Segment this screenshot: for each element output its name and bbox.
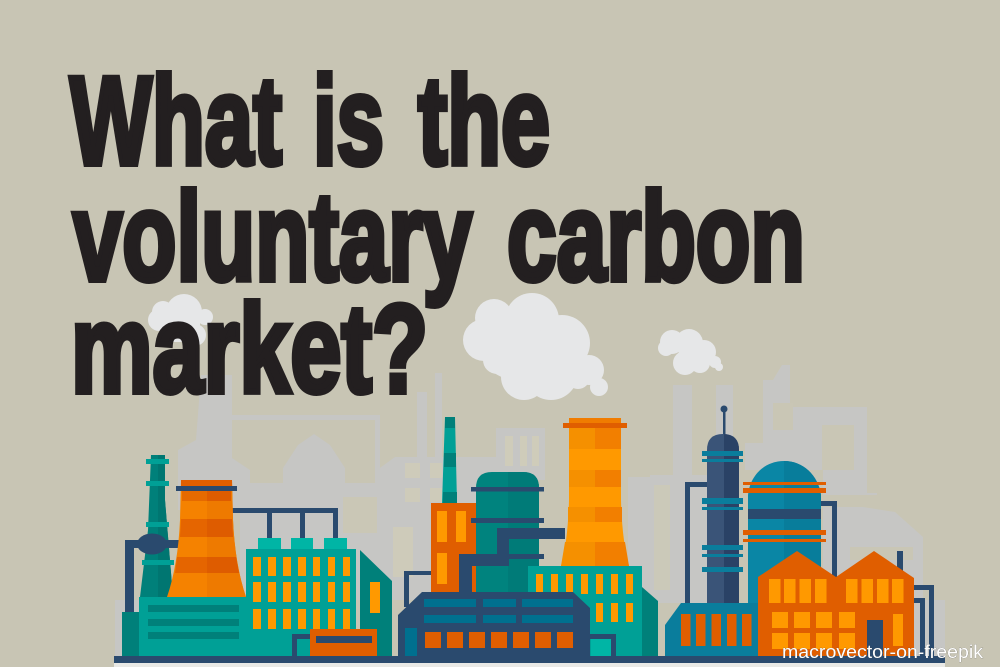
right pipes: [897, 551, 934, 656]
background factory silhouette: [115, 365, 945, 656]
photo credit: macrovector-on-freepik: [782, 642, 984, 662]
factory group: centre: [398, 417, 658, 656]
teal base block: [122, 597, 246, 656]
factory group: left: [122, 455, 392, 656]
teal storage tank: [471, 472, 544, 592]
teal building with windows: [246, 538, 356, 656]
antenna: [720, 406, 728, 435]
smoke cloud: left: [148, 294, 213, 346]
navy tower: [702, 434, 743, 603]
left chimney: [140, 455, 174, 597]
smoke cloud: right: [658, 329, 723, 375]
title: the: [418, 52, 550, 191]
orange gabled factory: [758, 551, 914, 656]
navy building: [398, 592, 590, 656]
teal building behind: [528, 566, 658, 656]
small pipe and orange box: [292, 629, 377, 656]
tall orange cooling tower: [561, 418, 629, 566]
orange tall building: [404, 503, 476, 607]
pipe with valve: [125, 534, 182, 612]
thick navy pipe: [459, 528, 565, 592]
factory group: right: [665, 406, 934, 656]
overhead pipes: [231, 508, 338, 538]
title: carbon: [507, 168, 805, 307]
smoke cloud: centre: [463, 293, 608, 400]
title: What: [70, 52, 282, 191]
blue base building: [665, 603, 758, 656]
title: is: [313, 52, 384, 191]
title: [70, 52, 805, 419]
side wedge building: [360, 550, 392, 656]
side pipe: [685, 482, 707, 603]
title: market?: [71, 280, 428, 419]
ground line: [114, 656, 945, 667]
title: voluntary: [73, 168, 472, 307]
blue domed tank: [743, 461, 837, 603]
striped chimney: [442, 417, 457, 503]
orange cooling tower: [167, 480, 246, 597]
